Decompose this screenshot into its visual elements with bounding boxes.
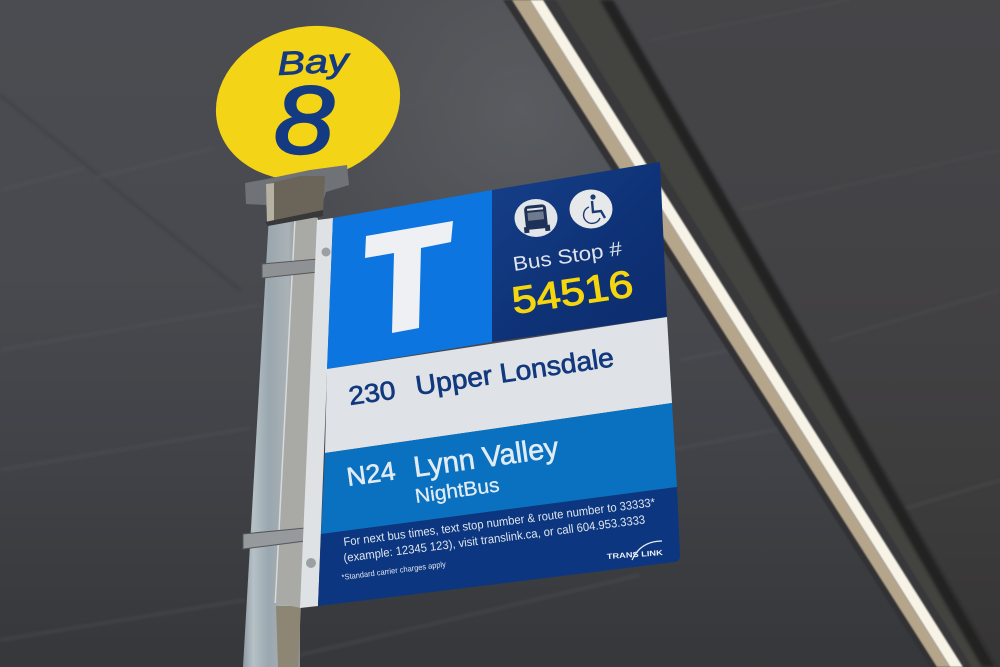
info text: (example: 12345 123), visit translink.ca, or call 604.953.3333 [343,512,646,565]
icon: bus [514,199,558,237]
TransLink logo: TRANS LINK [607,548,664,561]
white route band [325,317,672,453]
info text [341,495,656,582]
blue route band [321,403,677,534]
info text: *Standard carrier charges apply [341,560,446,582]
clamp upper [262,259,318,278]
screws [322,248,330,256]
channel [275,214,318,608]
bus stop label: Bus Stop # [511,238,625,276]
route N24 name: Lynn Valley [412,432,561,484]
route N24 number: N24 [345,455,397,492]
mounting strip [300,218,333,608]
pole [243,214,318,667]
T logo [365,221,453,333]
bus stop number: 54516 [509,263,636,323]
route 230 name: Upper Lonsdale [414,342,616,401]
TransLink logo [607,541,664,561]
navy stop block [492,162,667,342]
clamp lower [243,528,305,549]
info text: For next bus times, text stop number & route number to 33333* [343,495,656,549]
NightBus label: NightBus [414,474,501,508]
bay sign: yellow oval [199,7,417,199]
bus stop sign panel [300,162,680,608]
navy info band [318,487,680,606]
bay number: 8 [274,67,334,174]
light fixture beam [503,0,1000,667]
pole mount bracket [245,165,349,226]
bay label: Bay [276,41,352,82]
blue T block [327,190,492,369]
icon: wheelchair [570,190,612,228]
route 230 number: 230 [347,375,397,411]
